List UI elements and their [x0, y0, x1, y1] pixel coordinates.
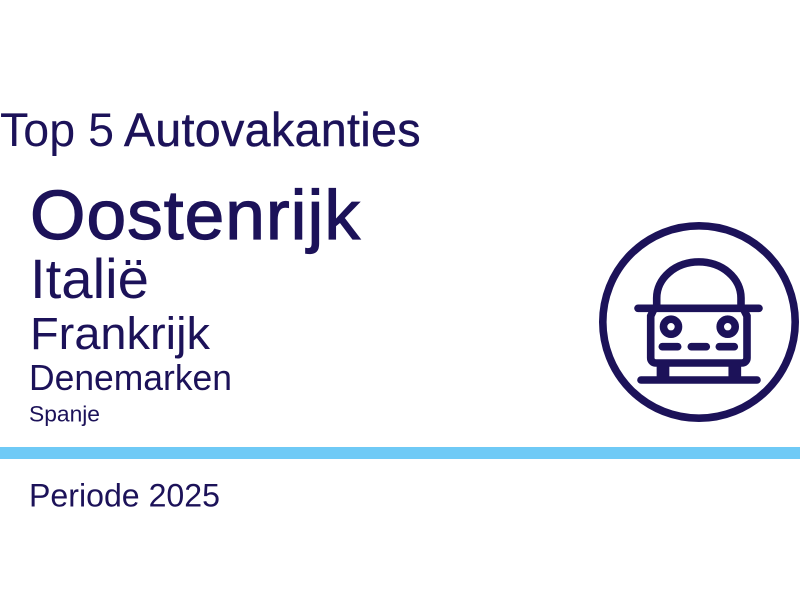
rank 5: Spanje: Spanje: [29, 402, 100, 426]
rank 4: Denemarken: Denemarken: [29, 357, 232, 398]
rank 1: Oostenrijk: Oostenrijk: [30, 176, 361, 254]
icon: car in circle: [603, 226, 795, 418]
period label: Periode 2025: [29, 478, 220, 514]
divider bar: [0, 447, 800, 459]
ranked list of countries: [29, 176, 361, 426]
rank 3: Frankrijk: Frankrijk: [30, 308, 211, 359]
rank 2: Italië: Italië: [30, 247, 149, 310]
title: Top 5: [0, 103, 114, 156]
title: [0, 103, 421, 156]
title: Autovakanties: [124, 103, 421, 156]
